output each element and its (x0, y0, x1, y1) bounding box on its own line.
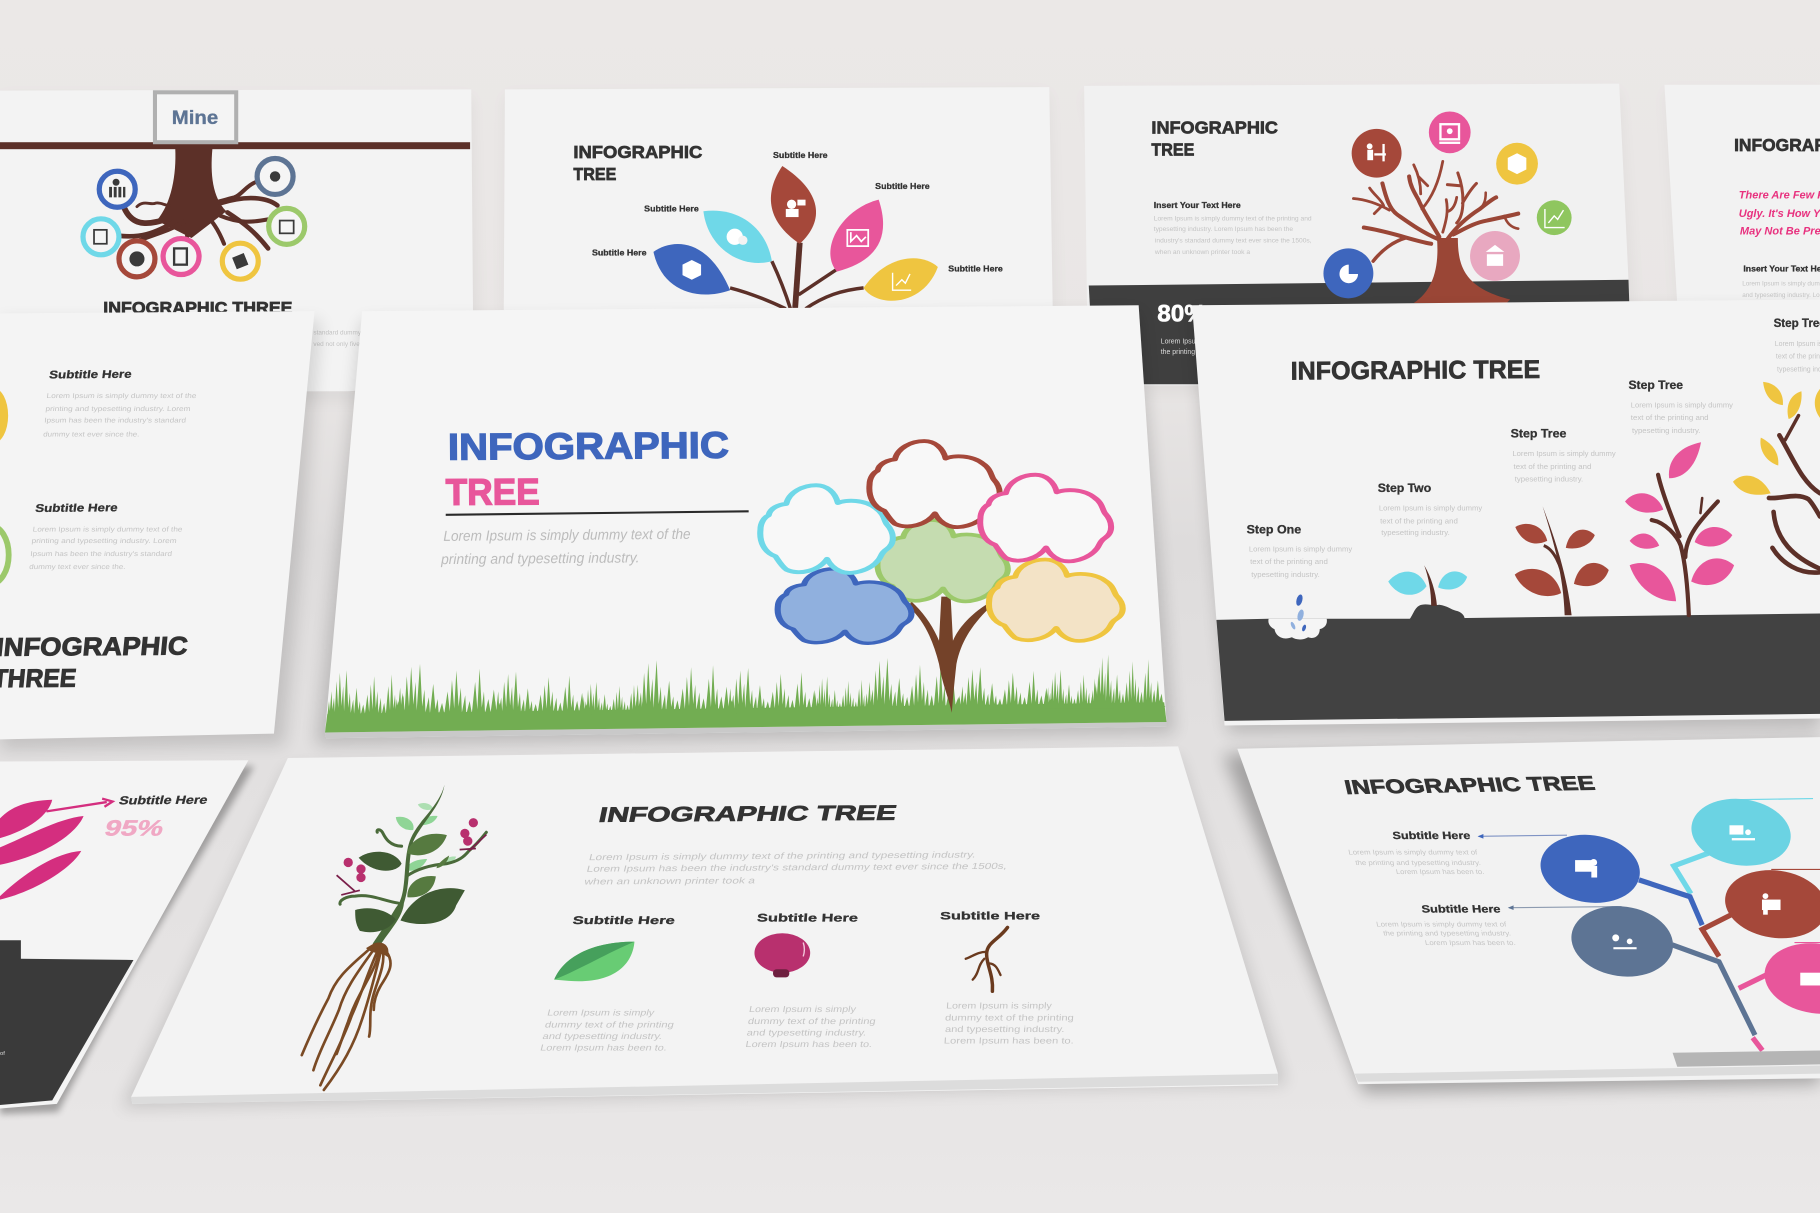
ring icons (94, 171, 294, 269)
column text three: Lorem Ipsum has been to. (944, 1036, 1074, 1046)
subtitle: printing and typesetting industry. (440, 550, 640, 568)
column text two: dummy text of the printing (747, 1016, 877, 1026)
paragraph one: Lorem Ipsum has been to. (1395, 869, 1485, 876)
panel: 95 percent (0, 760, 248, 1109)
heading (0, 633, 189, 693)
text block: Lorem Ipsum is simply dummy text of the printing and (1154, 216, 1312, 223)
text block (1742, 264, 1820, 299)
paragraph two: Lorem Ipsum is simply dummy text of the (32, 527, 183, 534)
pink quote (1739, 190, 1820, 237)
tree (1353, 161, 1518, 303)
slide edge (131, 1074, 1278, 1104)
paragraph one: printing and typesetting industry. Lorem (45, 406, 191, 413)
tree circles (1323, 111, 1572, 298)
column text one: dummy text of the printing (544, 1019, 675, 1029)
cloud canopy (760, 441, 1123, 643)
grass (325, 655, 1167, 732)
column text one (539, 1008, 675, 1052)
paragraph two: the printing and typesetting industry. (1383, 931, 1512, 938)
mine label box (155, 92, 236, 142)
subtitle: Lorem Ipsum is simply dummy text of the (443, 527, 691, 545)
text block: typesetting industry. Lorem Ipsum has been the (1154, 226, 1293, 233)
column text three: and typesetting industry. (945, 1024, 1065, 1034)
paragraph one: Ipsum has been the industry's standard (44, 418, 186, 425)
intro paragraph: when an unknown printer took a (582, 875, 756, 886)
seed hole and drops (1268, 594, 1327, 639)
text block: when an unknown printer took a (1154, 249, 1251, 256)
paragraph two: dummy text ever since the. (29, 564, 126, 571)
heading: INFOGRAPHIC THREE (103, 298, 292, 317)
heading (573, 142, 703, 184)
paragraph two: printing and typesetting industry. Lorem (31, 538, 177, 545)
step two: Step Two (1378, 482, 1431, 495)
subtitle one with arrow: Subtitle Here (1392, 831, 1471, 842)
column text two: Lorem Ipsum has been to. (745, 1039, 873, 1049)
ground block (0, 940, 133, 1105)
coloured leaves (653, 166, 938, 301)
panel: branching tree (1237, 737, 1820, 1084)
step three: typesetting industry. (1515, 477, 1583, 484)
heading: INFOGRAPHIC TREE (1291, 356, 1540, 386)
step four (1628, 379, 1734, 435)
side text fragment (313, 329, 362, 348)
arrow (46, 799, 113, 811)
step four: Step Tree (1628, 379, 1684, 392)
paragraph one: dummy text ever since the. (43, 431, 140, 438)
paragraph one (1348, 849, 1485, 876)
heading: INFOGRAPHIC (1151, 118, 1278, 138)
heading (1151, 118, 1278, 160)
panel: infographic three text (0, 311, 315, 739)
paragraph one: Lorem Ipsum is simply dummy text of (1348, 849, 1478, 856)
paragraph one: the printing and typesetting industry. (1355, 860, 1481, 867)
step one: Step One (1247, 523, 1302, 536)
ground line (0, 142, 470, 149)
paragraph one: Lorem Ipsum is simply dummy text of the (46, 393, 197, 400)
heading (445, 424, 729, 513)
panel: leaves (504, 87, 1053, 313)
subtitles (572, 910, 1040, 927)
divider (446, 511, 749, 515)
icon: root (966, 927, 1008, 991)
caption: of (0, 1051, 5, 1057)
panel: growth steps (1192, 299, 1820, 725)
sprout (1388, 565, 1467, 620)
ground band (1216, 613, 1820, 721)
leaf labels: Subtitle Here (948, 264, 1003, 274)
stat caption (1161, 339, 1201, 356)
leaf labels: Subtitle Here (592, 247, 647, 257)
stat caption: Lorem Ipsum (1161, 339, 1201, 346)
paragraph two: Lorem Ipsum has been to. (1424, 940, 1516, 947)
icon rings (83, 158, 305, 279)
subtitle two with arrow (1421, 904, 1622, 915)
leaf labels (592, 150, 1003, 274)
percent: 95% (102, 816, 167, 841)
slide edge (1355, 1066, 1820, 1082)
paragraph two: Ipsum has been the industry's standard (30, 551, 172, 558)
leaf labels: Subtitle Here (773, 150, 828, 160)
stat number: 80% (1157, 301, 1206, 328)
heading: INFOGRAPHIC (0, 633, 189, 662)
column text two: Lorem Ipsum is simply (748, 1004, 858, 1014)
text block: industry's standard dummy text ever since the 1500s, (1155, 238, 1312, 245)
step one: text of the printing and (1250, 559, 1328, 566)
panel: plant and roots (131, 746, 1278, 1104)
heading: INFOGRAPHIC TREE (1343, 773, 1597, 799)
mine label box: Mine (172, 107, 218, 129)
subtitle: Subtitle Here (118, 794, 210, 807)
step two: Lorem Ipsum is simply dummy (1379, 506, 1483, 513)
leaf labels: Subtitle Here (875, 181, 930, 191)
heading: TREE (1151, 140, 1194, 160)
step three: Step Tree (1511, 428, 1567, 441)
step one: typesetting industry. (1251, 572, 1320, 579)
step three (1511, 428, 1616, 484)
intro paragraph: Lorem Ipsum is simply dummy text of the printing and typesetting industry. (588, 850, 977, 862)
subtitles: Subtitle Here (940, 910, 1040, 922)
step four: typesetting industry. (1632, 428, 1701, 435)
column text three (944, 1001, 1074, 1046)
step two: typesetting industry. (1381, 530, 1450, 537)
subtitle (440, 527, 691, 568)
edge circles (0, 388, 9, 584)
intro paragraph (582, 850, 1008, 886)
step four: text of the printing and (1631, 415, 1709, 422)
step two (1378, 482, 1483, 537)
heading: TREE (573, 164, 616, 184)
column text two: and typesetting industry. (746, 1027, 867, 1037)
connectors (1639, 852, 1766, 1050)
subtitle two: Subtitle Here (34, 502, 118, 515)
pink plant (1625, 442, 1734, 615)
stat caption: the printing (1161, 349, 1195, 356)
leaf icons (682, 200, 911, 290)
intro paragraph: Lorem Ipsum has been the industry's standard dummy text ever since the 1500s, (586, 861, 1008, 874)
panel: main infographic tree (325, 305, 1167, 738)
column text two (745, 1004, 877, 1049)
heading: TREE (445, 470, 540, 513)
yellow plant (1733, 382, 1820, 573)
step four: Lorem Ipsum is simply dummy (1631, 402, 1734, 409)
leader lines (1734, 799, 1820, 943)
paragraph two (29, 527, 183, 571)
paragraph two: Lorem Ipsum is simply dummy text of (1376, 921, 1507, 928)
side text fragment: standard dummy (313, 329, 362, 336)
column text three: dummy text of the printing (945, 1012, 1074, 1022)
step five (1774, 317, 1820, 373)
step two: text of the printing and (1380, 519, 1458, 526)
pink foliage (0, 800, 84, 900)
panel: roots infographic three (0, 89, 474, 392)
subtitle one: Subtitle Here (48, 369, 132, 381)
tree trunk (909, 597, 989, 713)
leaf labels: Subtitle Here (644, 203, 699, 213)
brown plant (1515, 506, 1609, 615)
plant foliage (340, 785, 486, 946)
leaf stems (730, 243, 864, 309)
slide edge (325, 722, 1167, 738)
root system (118, 149, 277, 248)
panel: quote slide (1664, 85, 1820, 304)
circle icons (1339, 124, 1565, 283)
column text one: Lorem Ipsum is simply (546, 1008, 656, 1018)
heading: INFOGRAPHIC TREE (597, 802, 899, 827)
heading: INFOGRAPHIC (448, 424, 729, 468)
paragraph two (1376, 921, 1516, 947)
subtitles: Subtitle Here (757, 913, 858, 925)
subtitles: Subtitle Here (572, 915, 676, 927)
panel: bare tree (1084, 84, 1630, 385)
subtitle two with arrow: Subtitle Here (1421, 904, 1501, 915)
side text fragment: ved not only five (313, 341, 360, 348)
column text one: Lorem Ipsum has been to. (539, 1043, 668, 1052)
ellipse nodes (1536, 793, 1820, 1020)
text block (1154, 200, 1312, 256)
icon: berry (754, 933, 810, 977)
step one (1247, 523, 1353, 579)
step one: Lorem Ipsum is simply dummy (1249, 546, 1353, 553)
roots (302, 944, 391, 1090)
heading: INFOGRAPHIC (573, 142, 703, 162)
step three: Lorem Ipsum is simply dummy (1512, 451, 1616, 458)
column text one: and typesetting industry. (542, 1031, 664, 1041)
step three: text of the printing and (1514, 464, 1591, 471)
node icons (1575, 825, 1820, 985)
text block: Insert Your Text Here (1154, 200, 1241, 210)
berries (337, 818, 486, 895)
dark band (1089, 280, 1630, 384)
paragraph one (43, 393, 197, 438)
column text three: Lorem Ipsum is simply (946, 1001, 1053, 1011)
grey base (1673, 1050, 1820, 1067)
subtitle one with arrow (1392, 831, 1567, 842)
icon: leaf (554, 942, 634, 981)
